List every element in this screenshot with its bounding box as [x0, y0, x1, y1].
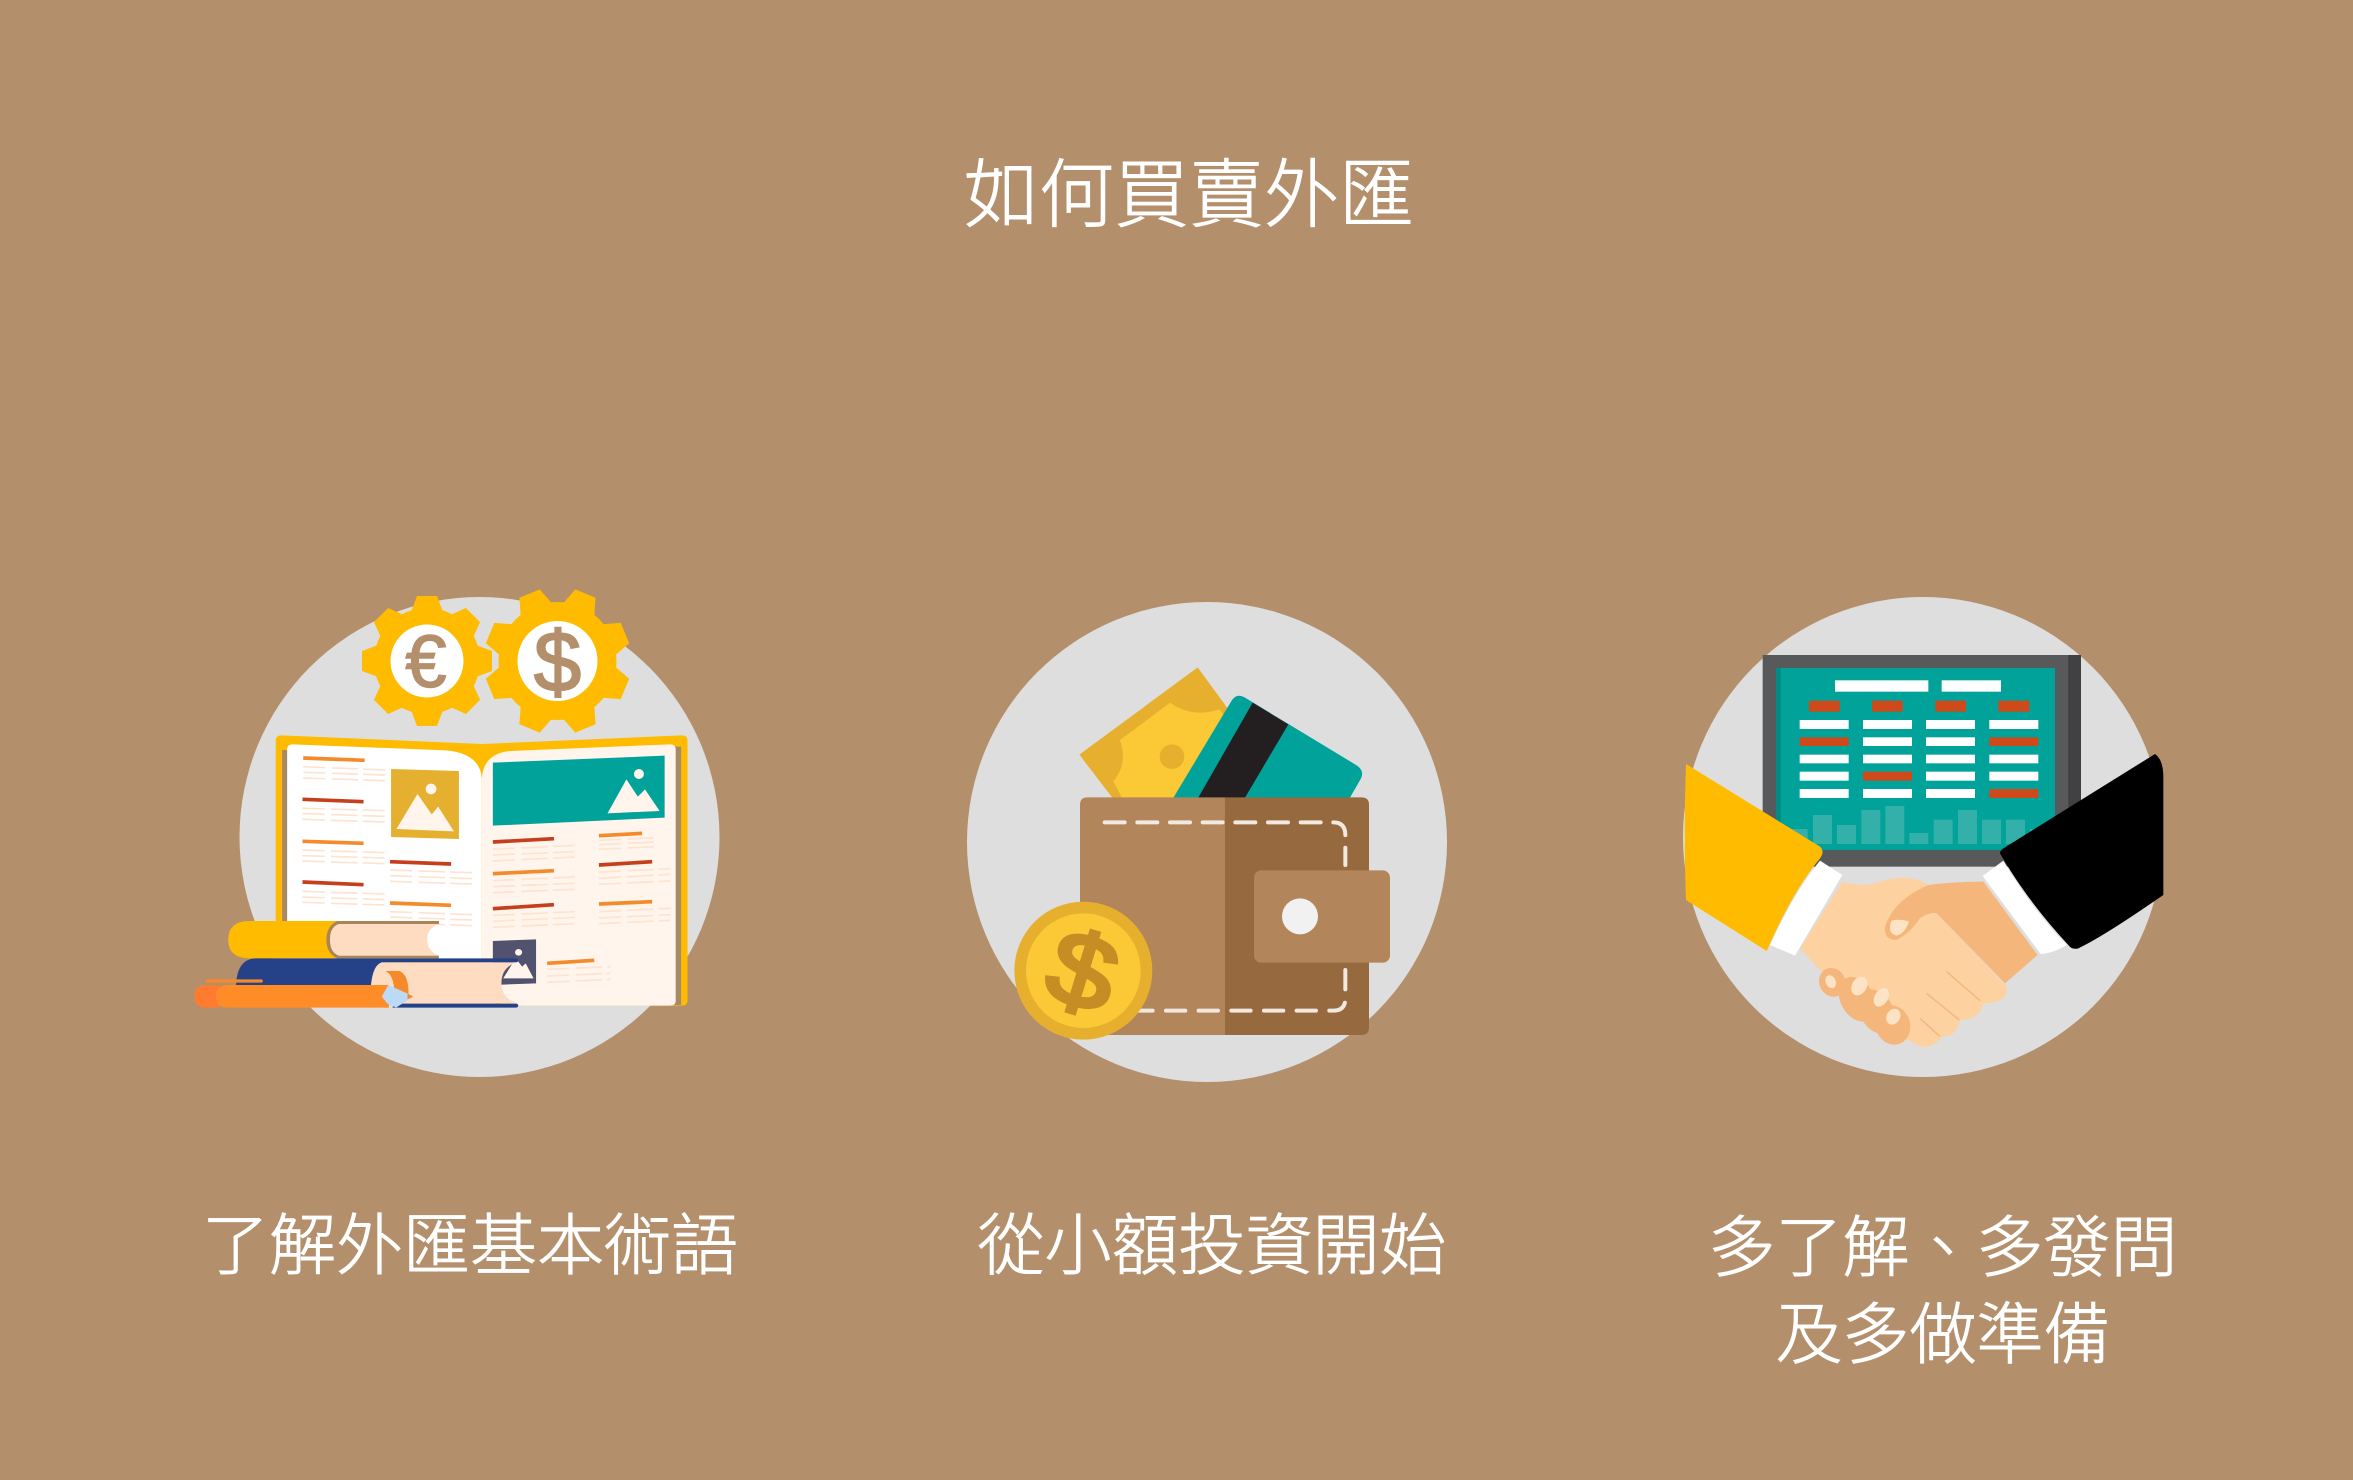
text lines: [302, 767, 670, 982]
bank card: [1170, 696, 1362, 803]
left cuff: [1770, 861, 1842, 956]
yellow book: [228, 921, 337, 958]
right cuff: [1983, 861, 2067, 954]
dollar gear: $: [534, 615, 581, 710]
label: learn, ask and prepare: [1708, 1211, 2178, 1373]
dollar gear: [484, 587, 631, 735]
gold coin: $: [1034, 906, 1131, 1036]
red column heads: [1809, 701, 2029, 712]
thumbnail: [1890, 920, 1909, 936]
picture: dark small: [493, 939, 536, 985]
label: learn, ask and prepare: 及多做準備: [1776, 1298, 2110, 1373]
euro gear: [362, 596, 492, 726]
background circle: [967, 602, 1447, 1082]
icon: handshake and stock screen: [1683, 597, 2164, 1077]
dark hand: [1885, 882, 2038, 983]
left page: [287, 744, 482, 960]
background circle: [1683, 597, 2163, 1077]
fingernails: [1823, 974, 1903, 1027]
background circle: [240, 597, 720, 1077]
open book: [194, 735, 687, 1008]
bar chart: [1788, 806, 2047, 844]
data table: [1800, 720, 2038, 798]
pen: [206, 979, 263, 983]
screen header: [1835, 680, 2001, 692]
blue book: [236, 958, 518, 985]
monitor: [1763, 655, 2081, 867]
picture: gold: [391, 769, 459, 839]
wallet flap: [1254, 870, 1390, 963]
gold coin: [1014, 902, 1152, 1040]
icon: book with gears: [194, 589, 720, 1077]
icon: wallet: [967, 602, 1447, 1082]
black sleeve: [2000, 754, 2163, 949]
wallet stitching: [1105, 822, 1345, 1011]
picture: teal banner: [493, 756, 665, 826]
finger creases: [1920, 972, 1980, 1037]
curled fingers: [1814, 964, 1916, 1050]
euro gear: €: [405, 620, 447, 703]
label: learn the terms: 了解外匯基本術語: [202, 1209, 738, 1284]
flap button: [1282, 898, 1318, 934]
right page: [482, 744, 676, 1006]
banknote: [1079, 667, 1230, 803]
wallet body: [1080, 797, 1369, 1035]
title: 如何買賣外匯: [964, 153, 1414, 237]
label: start small: 從小額投資開始: [978, 1209, 1446, 1284]
label: learn, ask and prepare: 多了解、多發問: [1708, 1211, 2178, 1286]
yellow sleeve: [1685, 764, 1822, 951]
light hand: [1800, 878, 2007, 1047]
